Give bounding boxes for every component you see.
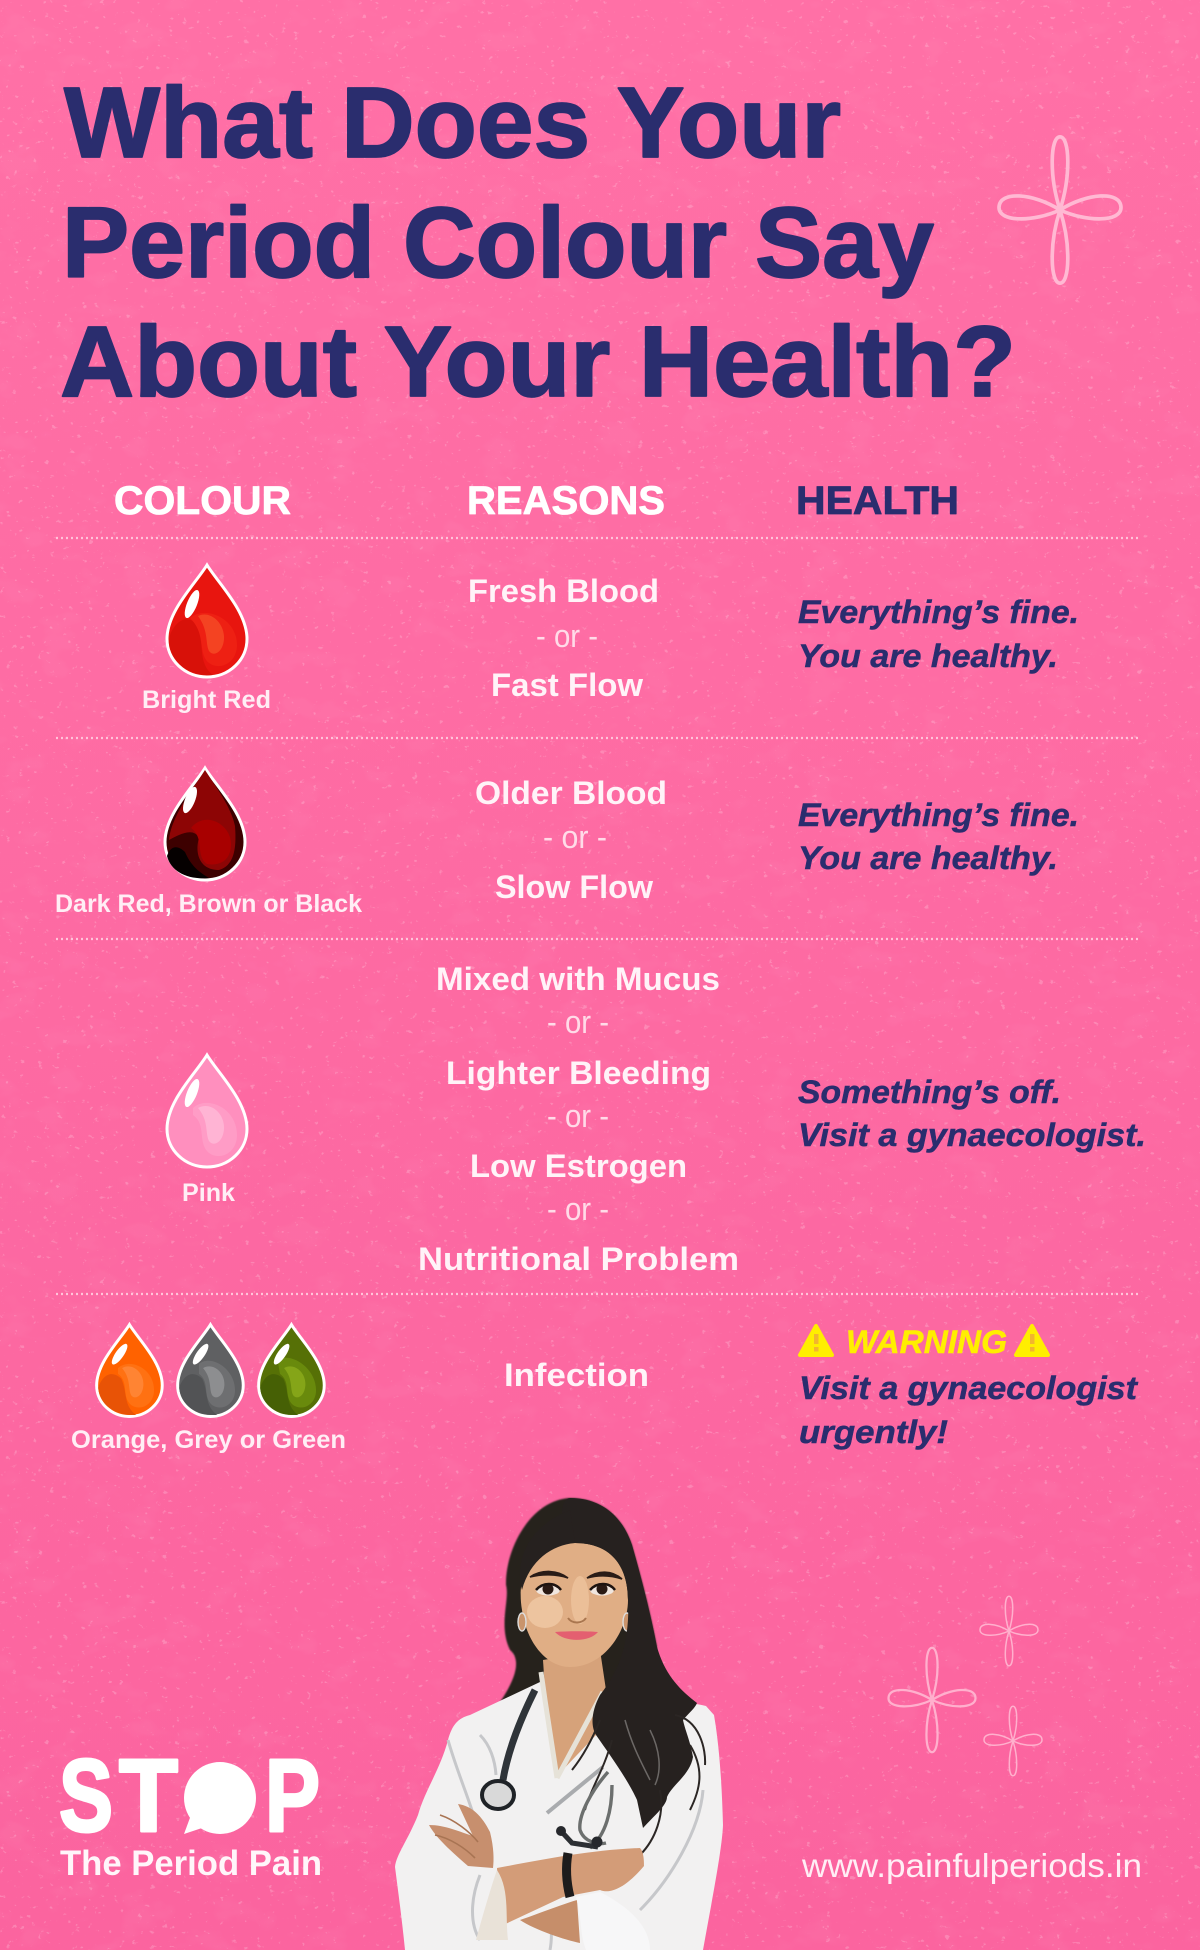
warning message: Visit a gynaecologist	[799, 1370, 1138, 1406]
icon: bright red drop	[167, 565, 247, 677]
health: warning	[799, 1324, 1138, 1450]
row: pink	[167, 961, 1146, 1277]
title: Period Colour Say	[62, 187, 934, 299]
stethoscope	[482, 1690, 612, 1848]
reasons: dark red: Older Blood	[475, 775, 667, 811]
reasons: infection: Infection	[504, 1357, 649, 1393]
warning message: urgently!	[799, 1414, 948, 1450]
icon: orange drop	[97, 1325, 162, 1416]
health: dark red: Everything’s fine.	[798, 797, 1079, 833]
icon: warning triangle left	[800, 1326, 832, 1355]
logo: stop the period pain: O	[188, 1755, 252, 1846]
icon: pink drop	[167, 1055, 247, 1167]
column headings	[114, 479, 959, 523]
reasons: pink: Mixed with Mucus	[436, 961, 720, 997]
health: pink	[798, 1074, 1146, 1153]
doctor illustration	[395, 1498, 723, 1950]
reasons: pink: - or -	[547, 1004, 609, 1040]
column headings: COLOUR	[114, 479, 291, 523]
white coat	[395, 1682, 723, 1950]
warning message	[799, 1370, 1138, 1450]
title: About Your Health?	[60, 306, 1016, 418]
neck and chest	[543, 1650, 606, 1776]
decorative sparkles bottom right	[888, 1596, 1042, 1776]
logo: stop the period pain: T	[119, 1738, 178, 1853]
column headings: HEALTH	[796, 479, 959, 523]
warning word: WARNING	[846, 1324, 1007, 1360]
icon: green drop	[259, 1325, 324, 1416]
label: dark red: Dark Red, Brown or Black	[55, 890, 362, 918]
health: pink: Visit a gynaecologist.	[798, 1117, 1146, 1153]
label: pink: Pink	[182, 1179, 235, 1207]
label: bright red: Bright Red	[142, 686, 271, 714]
hair front	[562, 1498, 697, 1828]
icon: dark red drop	[165, 768, 245, 880]
health: pink: Something’s off.	[798, 1074, 1061, 1110]
crossed arms	[429, 1804, 650, 1950]
reasons: pink: Lighter Bleeding	[446, 1055, 711, 1091]
row: orange grey green	[59, 1324, 1142, 1950]
reasons: bright red: - or -	[536, 618, 598, 654]
row: dark red	[55, 768, 1079, 918]
reasons: dark red	[475, 775, 667, 905]
title	[60, 67, 1016, 418]
health: dark red	[798, 797, 1079, 876]
title: What Does Your	[64, 67, 841, 179]
reasons: dark red: Slow Flow	[495, 869, 653, 905]
column headings: REASONS	[467, 479, 665, 523]
reasons: bright red: Fast Flow	[491, 667, 643, 703]
icon: grey drop	[178, 1325, 243, 1416]
logo: stop the period pain	[59, 1738, 322, 1883]
row: bright red	[142, 565, 1079, 714]
reasons: dark red: - or -	[543, 819, 607, 855]
website url: www.painfulperiods.in	[801, 1847, 1142, 1884]
reasons: pink: Low Estrogen	[470, 1148, 687, 1184]
health: bright red: You are healthy.	[798, 638, 1058, 674]
reasons: bright red	[468, 573, 659, 703]
health: bright red: Everything’s fine.	[798, 594, 1079, 630]
health: dark red: You are healthy.	[798, 840, 1058, 876]
face	[521, 1543, 628, 1667]
reasons: pink: - or -	[547, 1191, 609, 1227]
icon: warning triangle right	[1016, 1326, 1048, 1355]
decorative sparkle top right	[999, 137, 1121, 283]
logo: stop the period pain: The Period Pain	[60, 1844, 322, 1883]
reasons: pink	[418, 961, 739, 1277]
reasons: pink: - or -	[547, 1098, 609, 1134]
reasons: bright red: Fresh Blood	[468, 573, 659, 609]
logo: stop the period pain: S	[59, 1738, 113, 1853]
reasons: pink: Nutritional Problem	[418, 1241, 739, 1277]
logo: stop the period pain: P	[265, 1738, 320, 1853]
label: orange grey green: Orange, Grey or Green	[71, 1426, 346, 1454]
health: bright red	[798, 594, 1079, 674]
